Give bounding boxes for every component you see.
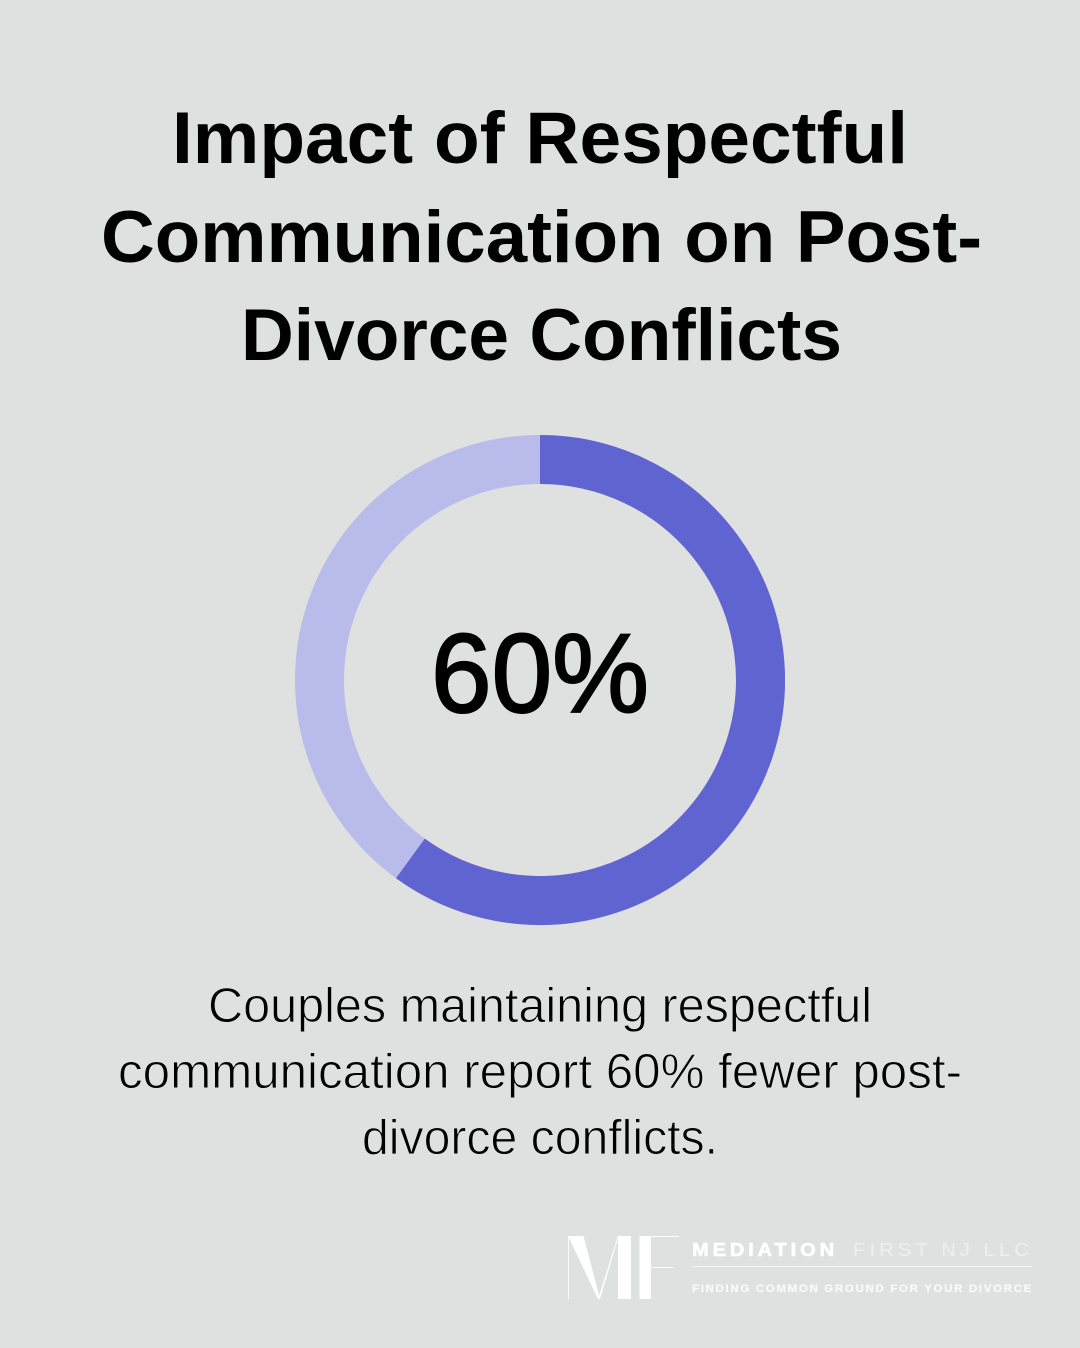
company name: FIRST NJ LLC: [853, 1240, 1033, 1260]
description text: divorce conflicts.: [362, 1111, 718, 1165]
tagline: FINDING COMMON GROUND FOR YOUR DIVORCE: [692, 1283, 1033, 1295]
title: [101, 98, 982, 376]
title: Communication on Post-: [101, 197, 982, 278]
divider: [692, 1266, 1032, 1267]
icon: MF monogram: [568, 1236, 679, 1299]
company name: MEDIATION: [692, 1240, 838, 1260]
description text: communication report 60% fewer post-: [118, 1045, 962, 1099]
description text: Couples maintaining respectful: [208, 979, 872, 1033]
donut chart: 60%: [320, 460, 760, 900]
title: Divorce Conflicts: [241, 295, 842, 376]
description text: [118, 979, 962, 1165]
logo: Mediation First NJ LLC: [568, 1236, 1033, 1299]
title: Impact of Respectful: [172, 98, 908, 179]
company name: [692, 1240, 1033, 1260]
donut value: 60%: [431, 611, 649, 736]
